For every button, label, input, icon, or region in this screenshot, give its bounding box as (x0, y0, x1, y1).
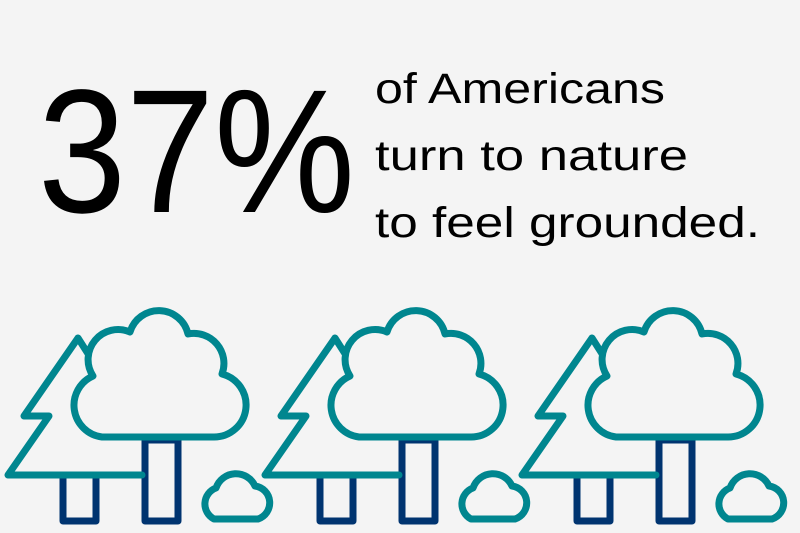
big statistic 37%: 37% (38, 54, 355, 250)
statistic description: of Americans (375, 65, 665, 113)
statistic description: turn to nature (375, 132, 688, 180)
tree group 1 (8, 311, 270, 521)
tree group 2 (265, 311, 527, 521)
tree group 3 (522, 311, 784, 521)
statistic description: to feel grounded. (375, 199, 760, 247)
statistic description (375, 65, 760, 247)
